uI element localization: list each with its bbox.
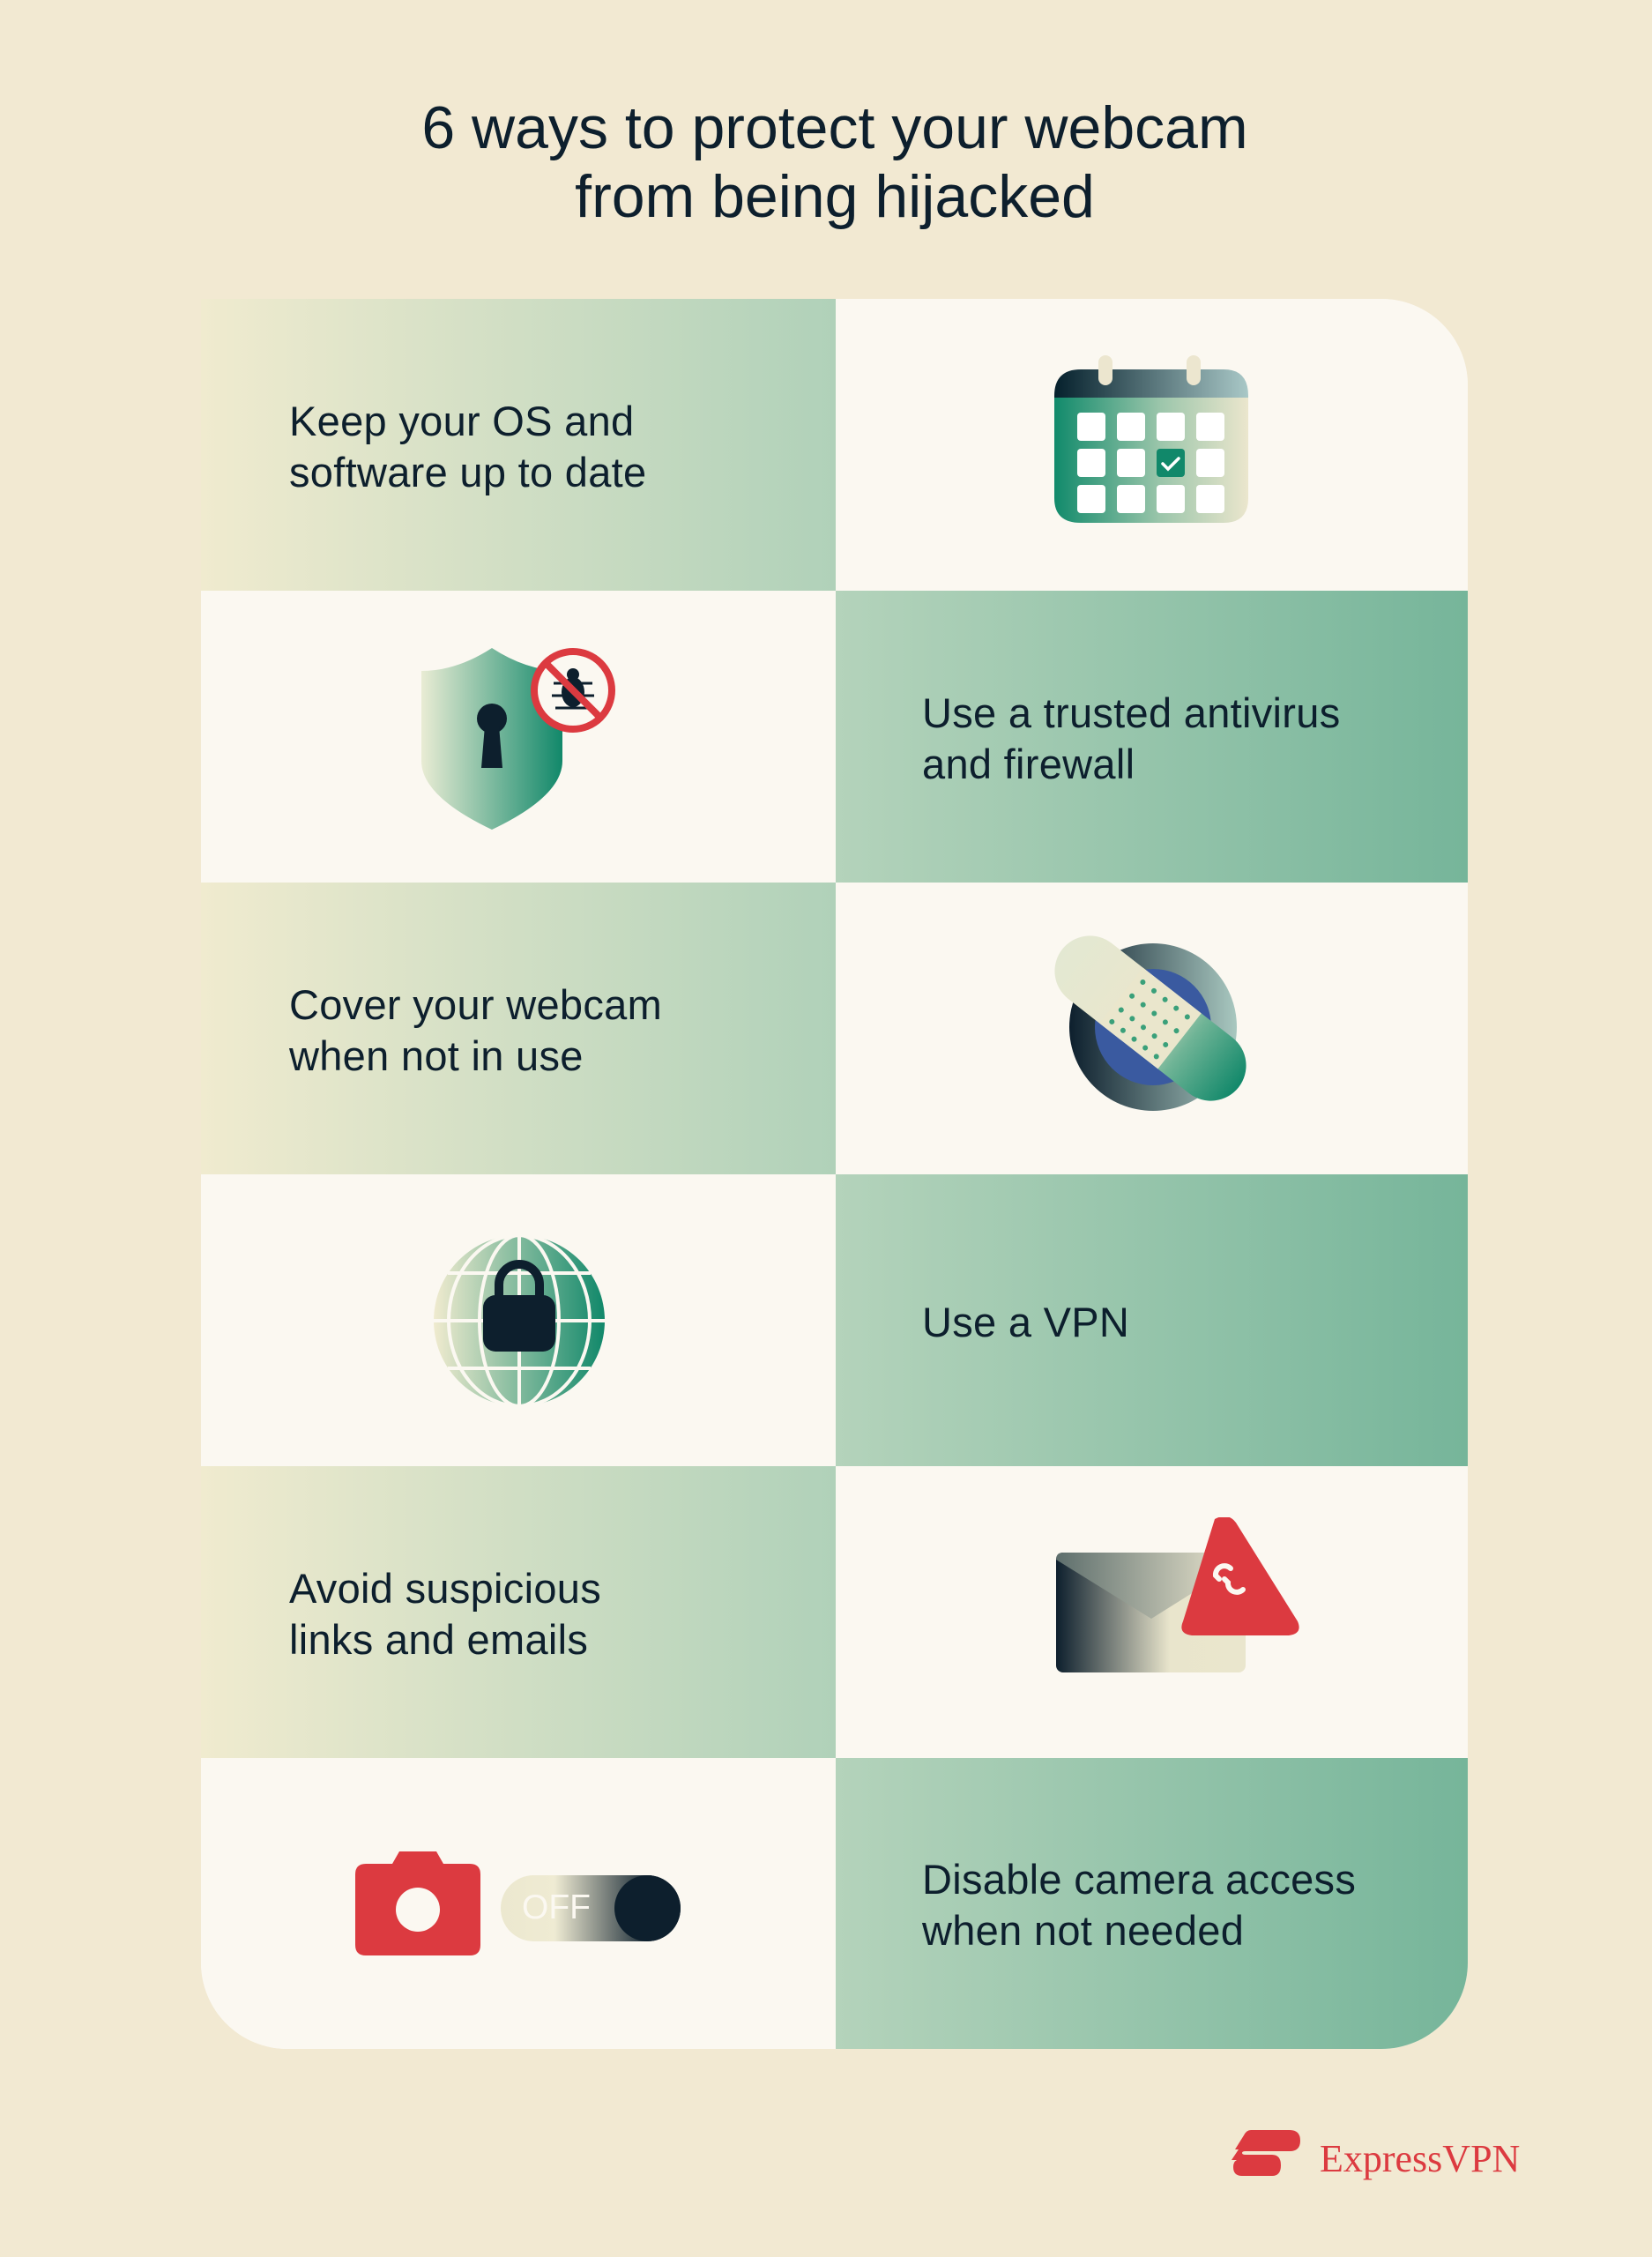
cell: disable text: when not needed bbox=[922, 1907, 1244, 1954]
cell: vpn text bbox=[836, 1174, 1468, 1466]
icon: off toggle bbox=[501, 1875, 681, 1941]
cell: antivirus text bbox=[836, 591, 1468, 883]
grid panel bbox=[201, 299, 1468, 2049]
icon: off toggle: OFF bbox=[522, 1888, 591, 1926]
cell: update text: Keep your OS and bbox=[289, 397, 635, 444]
cell: links text bbox=[201, 1466, 836, 1758]
cell: cover text: when not in use bbox=[289, 1032, 584, 1079]
icon: bandaged webcam bbox=[1054, 936, 1246, 1111]
title bbox=[421, 94, 1248, 230]
cell: shield bbox=[201, 591, 836, 883]
cell: cover text bbox=[201, 883, 836, 1174]
cell: update text: software up to date bbox=[289, 448, 646, 495]
cell: cover text: Cover your webcam bbox=[289, 980, 662, 1028]
cell: antivirus text: and firewall bbox=[922, 741, 1135, 786]
icon: calendar bbox=[1054, 355, 1248, 523]
cell: camera off bbox=[201, 1758, 836, 2049]
title: 6 ways to protect your webcam bbox=[421, 94, 1248, 161]
cell: email bbox=[836, 1466, 1468, 1758]
icon: globe with lock bbox=[434, 1237, 605, 1404]
cell: bandage bbox=[836, 883, 1468, 1174]
cell: disable text: Disable camera access bbox=[922, 1856, 1356, 1903]
icon: envelope with warning bbox=[1056, 1517, 1299, 1672]
cell: disable text bbox=[836, 1758, 1468, 2049]
cell: links text: links and emails bbox=[289, 1615, 588, 1663]
logo text: ExpressVPN bbox=[1320, 2137, 1520, 2180]
icon: expressvpn mark bbox=[1232, 2130, 1300, 2176]
cell: calendar bbox=[836, 299, 1468, 591]
cell: globe bbox=[201, 1174, 836, 1466]
title: from being hijacked bbox=[575, 163, 1095, 230]
cell: vpn text: Use a VPN bbox=[922, 1298, 1129, 1345]
cell: antivirus text: Use a trusted antivirus bbox=[922, 689, 1340, 735]
cell: links text: Avoid suspicious bbox=[289, 1564, 601, 1612]
cell: update text bbox=[201, 299, 836, 591]
icon: shield with bug bbox=[421, 648, 615, 830]
icon: camera bbox=[355, 1851, 480, 1955]
logo bbox=[1232, 2130, 1520, 2180]
